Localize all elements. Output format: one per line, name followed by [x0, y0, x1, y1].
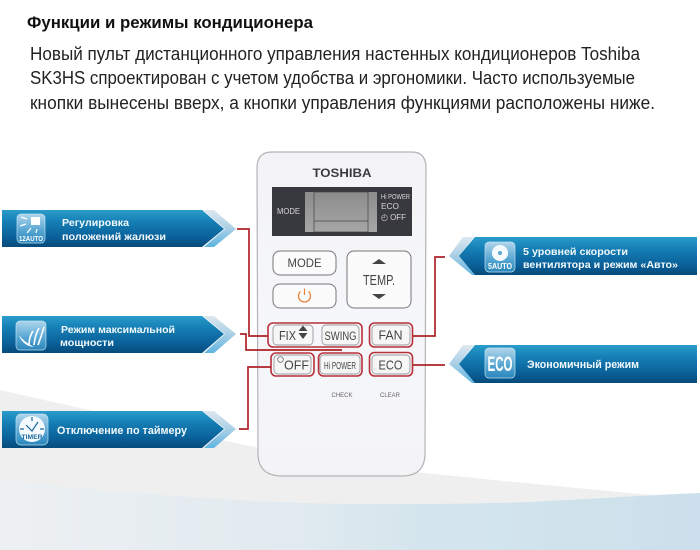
red button highlights [268, 323, 412, 376]
button: FAN: FAN [378, 328, 402, 342]
label [62, 217, 166, 243]
label: Экономичный режим [527, 359, 639, 371]
small labels: CLEAR [380, 393, 401, 399]
mode button [273, 251, 336, 275]
label: вентилятора и режим «Авто» [523, 259, 678, 271]
button: FAN [372, 325, 410, 345]
display: Hi POWER [381, 194, 410, 201]
remote body [257, 152, 426, 476]
background: gray swoosh [0, 390, 700, 550]
button: ECO [372, 355, 410, 374]
temperature button [347, 251, 411, 308]
remote control [257, 152, 426, 476]
display [272, 187, 412, 236]
intro text block [30, 44, 655, 113]
icon: ECO [485, 348, 515, 378]
intro text block: кнопки вынесены вверх, а кнопки управления функциями расположены ниже. [30, 93, 655, 113]
label: мощности [60, 337, 114, 349]
small labels [332, 393, 401, 399]
icon: power arrows [16, 321, 46, 350]
icon: fan 5 auto [485, 242, 515, 272]
banner: timer off [2, 411, 236, 448]
icon: timer clock [16, 414, 48, 445]
label [60, 324, 175, 349]
label: Регулировка [62, 217, 129, 229]
banner: fan speed [449, 237, 697, 275]
brand name: TOSHIBA [312, 166, 372, 180]
button: FIX: FIX [279, 329, 297, 343]
label: 5 уровней скорости [523, 246, 628, 258]
display: ◴ OFF [381, 212, 406, 222]
icon: louver 12 auto: 12AUTO [19, 236, 43, 243]
label: Отключение по таймеру [57, 425, 188, 437]
intro text block: Новый пульт дистанционного управления настенных кондиционеров Toshiba [30, 44, 641, 64]
button: timer OFF [274, 355, 311, 374]
small labels: CHECK [332, 393, 352, 399]
banner: louver position [2, 210, 236, 247]
label: положений жалюзи [62, 231, 166, 243]
button: SWING [322, 325, 359, 345]
label [523, 246, 678, 271]
button: FIX [273, 325, 313, 345]
button: Hi POWER: Hi POWER [324, 360, 356, 372]
power button [273, 284, 336, 308]
display: MODE [277, 206, 300, 216]
banner: eco mode [449, 345, 697, 383]
button: timer OFF: OFF [284, 358, 309, 372]
icon: louver 12 auto [17, 214, 45, 243]
display: ECO [381, 202, 399, 211]
label: Режим максимальной [61, 324, 175, 336]
button: ECO: ECO [378, 358, 403, 372]
temperature button: TEMP. [363, 272, 395, 289]
icon: ECO: ECO [488, 353, 512, 376]
button: SWING: SWING [324, 331, 357, 343]
banner: maximum power [2, 316, 236, 353]
button: Hi POWER [320, 355, 360, 374]
background: blue swoosh [0, 480, 700, 550]
connector lines [237, 229, 445, 429]
title: Функции и режимы кондиционера [27, 14, 314, 32]
mode button: MODE [288, 256, 322, 270]
icon: fan 5 auto: 5AUTO [488, 262, 512, 271]
icon: timer clock: TIMER [22, 434, 43, 441]
intro text block: SK3HS спроектирован с учетом удобства и эргономики. Часто используемые [30, 68, 635, 88]
